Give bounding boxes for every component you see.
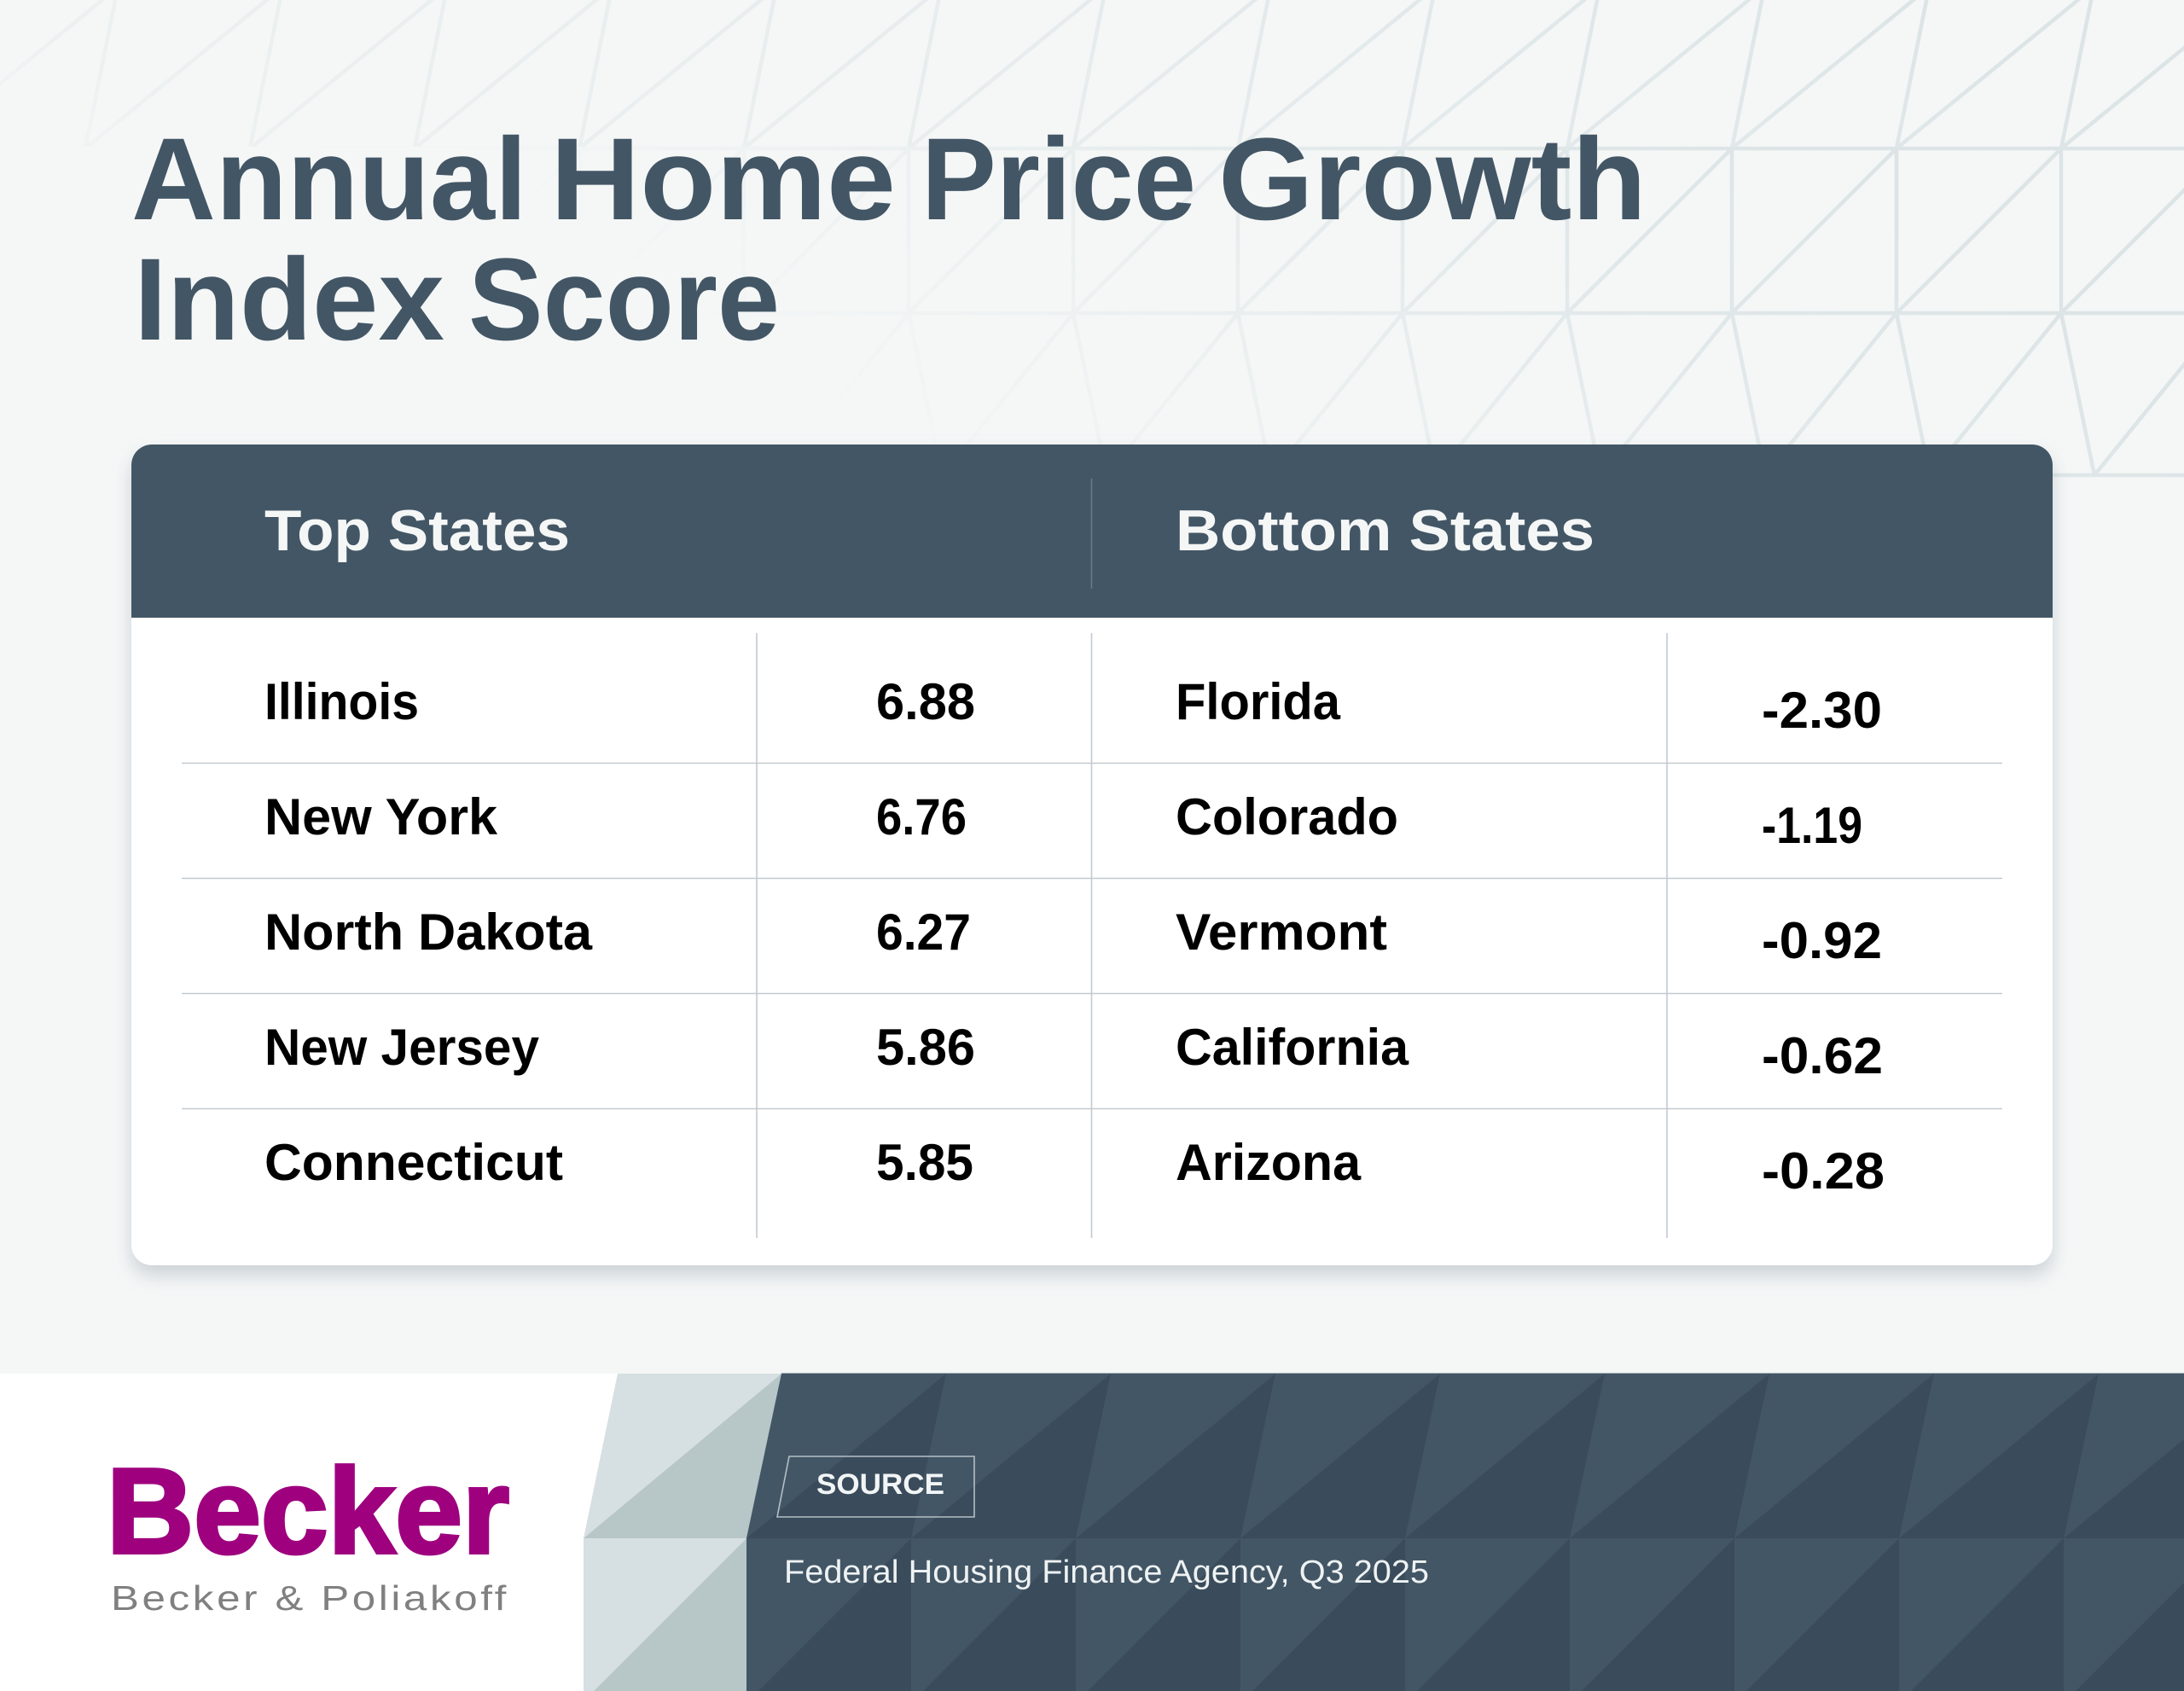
title: Annual	[131, 114, 527, 245]
background geometric line pattern	[0, 0, 2184, 488]
top states scores: 6.27	[876, 904, 971, 961]
panel: table card	[131, 445, 2053, 1265]
source text: Federal Housing Finance Agency, Q3 2025	[784, 1554, 1429, 1590]
bottom states names	[1176, 673, 1409, 1191]
top states names: Connecticut	[264, 1134, 563, 1191]
title: Score	[468, 235, 780, 365]
footer	[0, 1374, 2184, 1691]
top states scores: 5.85	[876, 1134, 973, 1191]
table header bar	[131, 445, 2053, 618]
title	[131, 114, 1647, 365]
logo: Becker & Poliakoff: Becker & Poliakoff	[111, 1578, 509, 1618]
card background	[131, 445, 2053, 1265]
heading: bottom states: Bottom States	[1176, 498, 1594, 563]
footer dark geometric band	[746, 1374, 2184, 1691]
bottom states scores: -0.62	[1762, 1027, 1883, 1084]
bottom states scores: -2.30	[1762, 682, 1882, 739]
top states scores	[876, 673, 975, 1191]
title: Price	[921, 114, 1196, 245]
source tag: SOURCE	[816, 1468, 944, 1501]
title: Index	[134, 235, 444, 365]
bottom states names: Vermont	[1176, 904, 1387, 961]
bottom states scores: -0.28	[1762, 1142, 1885, 1200]
bottom states names: Florida	[1176, 673, 1341, 730]
top states names: North Dakota	[264, 904, 593, 961]
table grid lines	[182, 633, 2002, 1238]
top states names: New Jersey	[264, 1019, 540, 1076]
top states scores: 6.76	[876, 788, 967, 846]
title: Growth	[1218, 114, 1647, 245]
source tag	[777, 1456, 974, 1517]
footer white logo area	[0, 1374, 785, 1691]
bottom states names: California	[1176, 1019, 1409, 1076]
heading: top states: Top States	[264, 498, 570, 563]
footer light geometric tiles	[584, 1374, 781, 1691]
bottom states scores: -1.19	[1762, 797, 1862, 854]
top states scores: 5.86	[876, 1019, 975, 1076]
top states names	[264, 673, 593, 1191]
bottom states names: Arizona	[1176, 1134, 1362, 1191]
bottom states names: Colorado	[1176, 788, 1398, 846]
top states names: New York	[264, 788, 498, 846]
logo: Becker wordmark: Becker	[107, 1444, 509, 1579]
title: Home	[550, 114, 896, 245]
top states names: Illinois	[264, 673, 419, 730]
bottom states scores	[1762, 682, 1885, 1200]
top states scores: 6.88	[876, 673, 975, 730]
bottom states scores: -0.92	[1762, 912, 1882, 969]
